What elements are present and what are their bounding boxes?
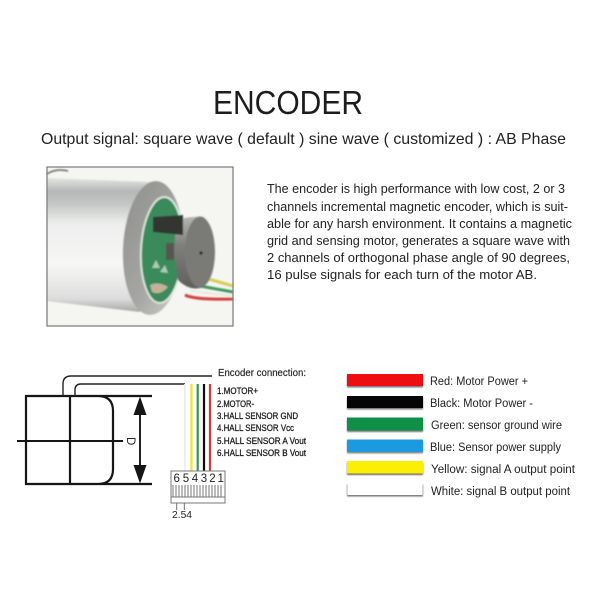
legend: white: White: signal B output point [431, 486, 571, 498]
title: ENCODER [213, 84, 363, 121]
description paragraph [267, 182, 572, 282]
pitch dimension: 2.54 [172, 510, 192, 521]
solder details on the board [150, 283, 168, 293]
encoder connection list: 5.HALL SENSOR A Vout [217, 436, 306, 446]
rear end plate [120, 180, 186, 316]
legend: yellow [347, 461, 576, 476]
legend: red: Red: Motor Power + [430, 376, 528, 388]
connector pin strip [171, 485, 225, 497]
encoder connection list: 2.MOTOR- [217, 399, 254, 409]
motor outline [26, 396, 152, 484]
diameter arrow [134, 396, 146, 484]
encoder connection list: 1.MOTOR+ [217, 386, 258, 396]
legend: red [347, 374, 528, 388]
encoder connection list [217, 368, 306, 458]
motor power cable [63, 376, 212, 396]
black connector [153, 215, 183, 235]
legend: yellow: Yellow: signal A output point [431, 464, 576, 476]
motor body [47, 178, 150, 312]
magnet cylinder [174, 217, 204, 288]
encoder connection list: 4.HALL SENSOR Vcc [217, 423, 294, 433]
photo: motor with encoder [47, 167, 233, 326]
photo frame [47, 167, 233, 326]
legend: black [347, 396, 533, 410]
connector pin numbers: 3 [201, 473, 207, 485]
connector pin numbers: 2 [209, 473, 216, 485]
wires: red, green, yellow [185, 278, 233, 299]
description paragraph: 2 channels of orthogonal phase angle of 90 degrees, [267, 251, 570, 265]
motor dimension drawing [17, 376, 212, 484]
diameter label: D [124, 437, 136, 445]
connector pin numbers [173, 473, 224, 485]
magnet disk face [185, 216, 215, 288]
legend: green: Green: sensor ground wire [431, 420, 562, 432]
green encoder circuit board [138, 196, 186, 304]
subtitle: Output signal: square wave ( default ) sine wave ( customized ) : AB Phase [41, 131, 566, 148]
encoder cable [75, 384, 185, 396]
legend: white [347, 483, 571, 498]
encoder connection list: 3.HALL SENSOR GND [217, 411, 298, 421]
coloured encoder wires [185, 384, 210, 471]
wire colour legend [347, 374, 576, 498]
legend: blue: Blue: Sensor power supply [430, 442, 561, 454]
encoder connection list: 6.HALL SENSOR B Vout [217, 448, 306, 458]
description paragraph: 16 pulse signals for each turn of the motor AB. [267, 268, 537, 282]
legend: green [347, 418, 562, 432]
shaft hole [199, 251, 203, 255]
description paragraph: The encoder is high performance with low cost, 2 or 3 [267, 182, 565, 196]
dark wire at top left [47, 170, 68, 174]
shaft [166, 243, 174, 260]
centre line [17, 440, 123, 442]
pitch dimension [172, 503, 192, 521]
connector pin numbers: 1 [217, 473, 224, 485]
encoder connection list: Encoder connection: [218, 368, 306, 379]
description paragraph: able for any harsh environment. It contains a magnetic [267, 217, 572, 231]
legend: blue [347, 440, 561, 454]
legend: black: Black: Motor Power - [430, 398, 533, 410]
connector pin numbers: 5 [183, 473, 189, 485]
connector with pins 6 to 1 [171, 471, 225, 503]
connector pin numbers: 6 [173, 473, 180, 485]
description paragraph: channels incremental magnetic encoder, which is suit- [267, 200, 568, 214]
connector pin numbers: 4 [192, 473, 199, 485]
description paragraph: grid and sensing motor, generates a square wave with [267, 234, 570, 248]
